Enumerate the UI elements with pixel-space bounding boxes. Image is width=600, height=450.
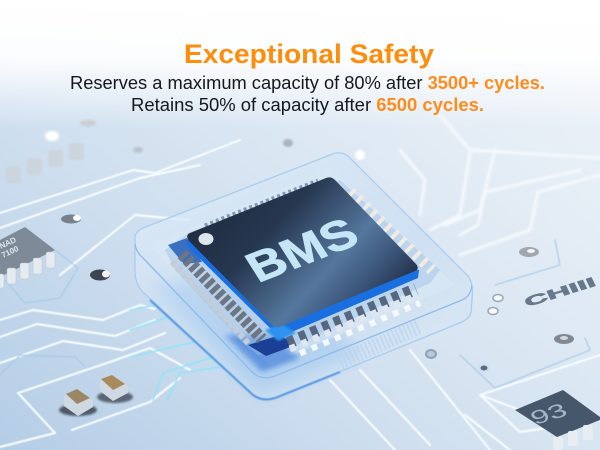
text: CHIII marking: CHIII (522, 275, 599, 310)
reflected pin stripes in glass (340, 326, 420, 362)
deep blue shade at front corner (225, 335, 300, 372)
capacitors bottom left (59, 375, 133, 416)
chip top face (187, 177, 418, 327)
component: NAD 7100 chip (0, 227, 55, 288)
component: 93 chip (515, 390, 600, 450)
component: NAD 7100 chip: 7100 (0, 244, 20, 260)
glowing chip edge (186, 240, 419, 335)
text: 50% capacity line: Retains 50% of capacity after 6500 cycles. (131, 95, 484, 115)
component: 93 chip: 93 (526, 399, 571, 429)
glass case (135, 153, 472, 399)
blurred capacitors top left (6, 120, 96, 183)
circuit traces (0, 115, 600, 450)
pin rows (172, 181, 432, 356)
screws and pads (61, 139, 574, 372)
text: BMS: BMS (237, 210, 367, 292)
BMS chip module (135, 153, 472, 399)
chip pin-one dot (198, 233, 214, 245)
top white fade (0, 0, 600, 128)
text: 80% capacity line: Reserves a maximum capacity of 80% after 3500+ cycles. (70, 73, 545, 93)
title: Exceptional Safety (184, 39, 434, 69)
blue glow under module (150, 270, 360, 395)
substrate under chip (165, 180, 440, 355)
